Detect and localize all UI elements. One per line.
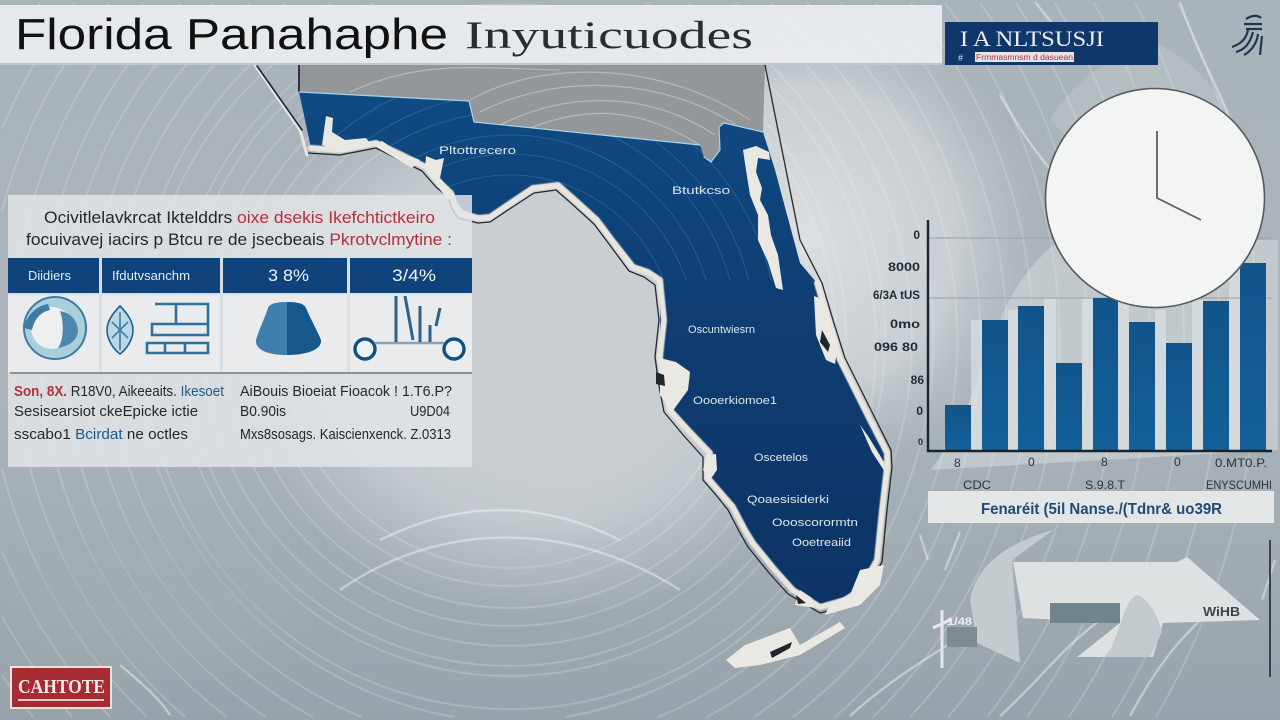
y axis labels: 6/3A tUS <box>873 288 920 302</box>
label: Oscuntwiesrn: Oscuntwiesrn <box>688 324 755 336</box>
icon: corner logo <box>1232 16 1262 55</box>
stamp small print <box>18 699 104 701</box>
map of Florida <box>242 65 892 668</box>
label: Ooetreaiid: Ooetreaiid <box>792 537 851 549</box>
county labels <box>439 145 858 549</box>
title text, lighter part: Inyuticuodes <box>465 14 753 57</box>
table rows left column <box>14 383 225 443</box>
icon: wheeled apparatus <box>355 296 464 359</box>
bar chart <box>873 220 1272 492</box>
y axis labels <box>873 228 924 447</box>
panel intro line two: focuivavej iacirs p Btcu re de jsecbeais Pkrotvclmytine : <box>26 230 452 249</box>
bars <box>945 263 1266 450</box>
diagram right label: WiHB <box>1203 604 1240 619</box>
table rows right column: Mxs8sosags. Kaiscienxenck. Z.0313 <box>240 426 451 443</box>
x axis labels: S.9.8.T <box>1085 478 1126 492</box>
diagram swoosh <box>970 530 1053 663</box>
diagram dome <box>1104 595 1162 657</box>
title banner <box>0 5 942 65</box>
icon: diamond and pipe network <box>107 304 208 354</box>
badge heading: I A NLTSUSJI <box>960 26 1104 51</box>
y axis labels: 8000 <box>888 260 920 274</box>
y axis labels: 86 <box>911 373 924 387</box>
chart grid lines <box>928 238 1272 298</box>
y axis labels: 0 <box>918 437 923 447</box>
x axis labels <box>954 455 1272 492</box>
table header cell 2: Ifdutvsanchm <box>112 268 190 283</box>
table rows right column: AiBouis Bioeiat Fioacok ! 1.T6.P? <box>240 383 452 400</box>
x axis labels: 0 <box>1028 455 1035 469</box>
diagram main body <box>1013 557 1260 657</box>
stamp text: CAHTOTE <box>18 676 105 698</box>
table rows right column: U9D04 <box>410 403 450 420</box>
table header cell 3 <box>223 258 347 293</box>
y axis labels: 096 80 <box>874 340 918 354</box>
table header cell 1 <box>8 258 99 293</box>
x axis labels: 8 <box>954 456 961 470</box>
gray land north of the state line <box>299 65 765 162</box>
title text: Florida Panahaphe <box>15 10 448 59</box>
red stamp <box>10 666 112 709</box>
coastal white shoals and islands <box>322 116 885 668</box>
icon: donut gauge <box>24 297 86 359</box>
label: Oscetelos: Oscetelos <box>754 452 809 464</box>
y axis labels: 0 <box>916 404 923 418</box>
table rows left column: Sesisearsiot ckeEpicke ictie <box>14 403 198 420</box>
left data panel <box>8 195 472 467</box>
table divider <box>10 372 472 374</box>
chart column shading <box>971 265 1240 450</box>
chart caption: Fenaréit (5il Nanse./(Tdnr& uo39R <box>981 501 1222 518</box>
x axis labels: CDC <box>963 478 991 492</box>
chart caption <box>928 491 1274 523</box>
icon: split dome <box>256 302 321 355</box>
diagram dark window <box>1050 603 1120 623</box>
panel intro line one: Ocivitlelavkrcat Iktelddrs oixe dsekis Ikefchtictkeiro <box>44 208 435 227</box>
clock hands <box>1157 131 1201 220</box>
diagram left post <box>933 610 950 668</box>
label: Qoaesisiderki: Qoaesisiderki <box>747 494 829 506</box>
cross-section diagram <box>933 530 1270 677</box>
label: Pltottrecero: Pltottrecero <box>439 145 516 157</box>
state shape <box>299 92 887 607</box>
badge sub label <box>975 52 1074 62</box>
table body cell backgrounds <box>8 295 472 372</box>
y axis labels: 0mo <box>890 317 920 331</box>
badge sub text: Frmmasmnsm d dasuean <box>976 53 1073 62</box>
label: Btutkcso: Btutkcso <box>672 185 730 197</box>
coastal dark marks <box>656 330 830 658</box>
label: Oooerkiomoe1: Oooerkiomoe1 <box>693 395 777 407</box>
coastline <box>255 65 892 613</box>
table rows left column: Son, 8X. R18V0, Aikeeaits. Ikesoet <box>14 383 225 400</box>
diagram left label: 1/48 <box>947 616 972 628</box>
gray land contour lines <box>350 68 750 145</box>
table rows left column: sscabo1 Bcirdat ne octles <box>14 426 188 443</box>
table header cell 3: 3 8% <box>268 266 309 285</box>
x axis labels: ENYSCUMHI <box>1206 478 1272 492</box>
x axis labels: 8 <box>1101 455 1108 469</box>
table header cell 1: Diidiers <box>28 268 71 283</box>
navy badge <box>945 22 1158 65</box>
diagram left block <box>947 627 977 647</box>
table header cell 4: 3/4% <box>392 266 436 285</box>
label: Oooscorormtn: Oooscorormtn <box>772 517 858 529</box>
chart axes <box>928 220 1272 451</box>
clock <box>1046 88 1264 308</box>
table header cell 4 <box>350 258 472 293</box>
badge small mark: # <box>958 53 963 63</box>
x axis labels: 0.MT0.P. <box>1215 456 1267 470</box>
table header cell 2 <box>102 258 220 293</box>
diagram scale bar <box>1269 540 1271 677</box>
y axis labels: 0 <box>913 228 920 242</box>
x axis labels: 0 <box>1174 455 1181 469</box>
table rows right column <box>240 383 452 443</box>
faint storm lines across the north of the state <box>337 98 772 280</box>
table rows right column: B0.90is <box>240 403 286 420</box>
